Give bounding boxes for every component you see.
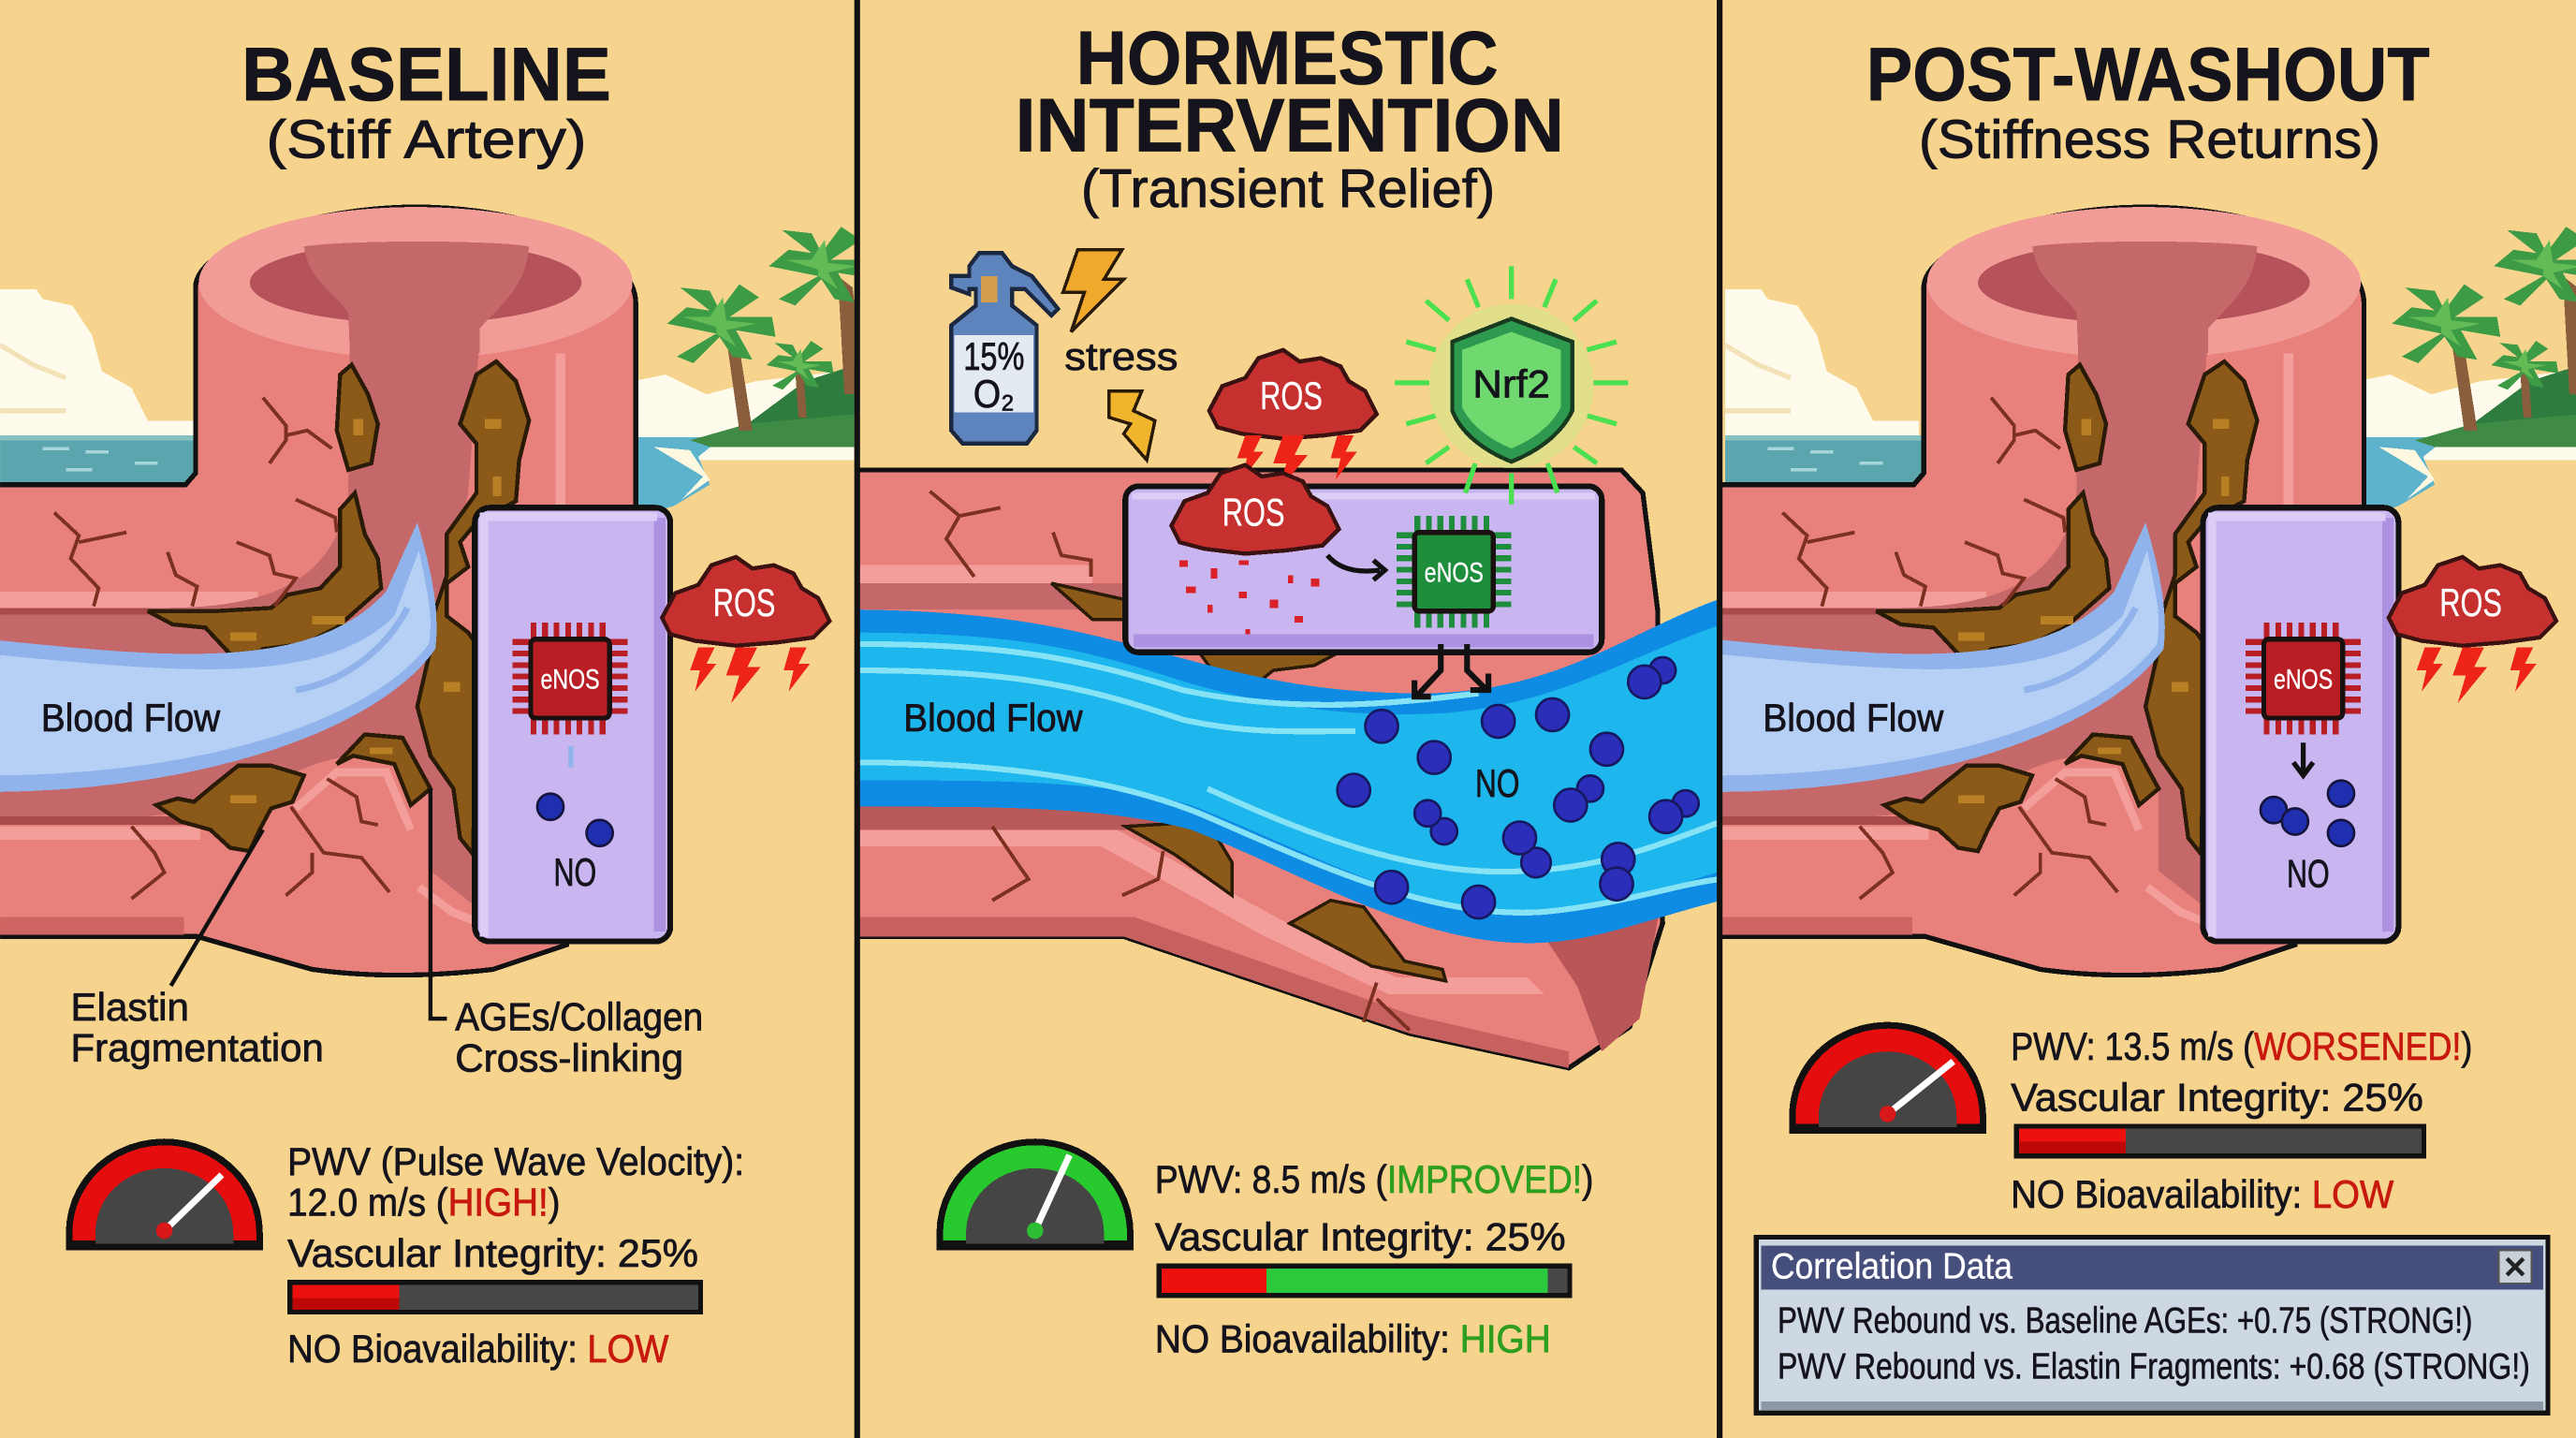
panel: hormetic intervention bbox=[846, 470, 1721, 1068]
panel: endothelial cell bbox=[1125, 486, 1602, 653]
metrics: baseline: Vascular Integrity: 25% bbox=[287, 1231, 698, 1275]
icon: NO molecules: NO bbox=[554, 850, 596, 894]
label: AGEs collagen cross-linking bbox=[455, 994, 703, 1079]
bar: vascular integrity bbox=[287, 1280, 703, 1314]
illustration: relaxed artery wall bbox=[846, 470, 1662, 1068]
title: hormetic intervention bbox=[1016, 17, 1564, 168]
title: baseline: BASELINE bbox=[242, 33, 611, 117]
gauge: intervention PWV bbox=[936, 1138, 1134, 1251]
icon: NO molecules with arrow: NO bbox=[2287, 852, 2330, 896]
icon: lower ROS cloud: ROS bbox=[1222, 491, 1284, 535]
metrics: intervention: PWV: 8.5 m/s (IMPROVED!) bbox=[1155, 1157, 1593, 1201]
title: hormetic intervention: HORMESTIC bbox=[1076, 17, 1499, 101]
illustration: beach scenery bbox=[0, 227, 877, 518]
arrows: eNOS to NO bbox=[1414, 644, 1488, 697]
metrics: post-washout: PWV: 13.5 m/s (WORSENED!) bbox=[2011, 1024, 2472, 1068]
icon: upper ROS cloud: ROS bbox=[1260, 374, 1323, 418]
illustration: wide blood stream bbox=[855, 598, 1721, 943]
metrics: baseline: PWV (Pulse Wave Velocity): bbox=[287, 1139, 744, 1183]
icon: Nrf2 shield with glow bbox=[1395, 266, 1628, 505]
metrics: intervention bbox=[1155, 1157, 1593, 1360]
metrics: intervention: Vascular Integrity: 25% bbox=[1155, 1215, 1566, 1259]
label: blood flow: Blood Flow bbox=[41, 696, 221, 740]
icon: eNOS chip: eNOS bbox=[540, 664, 600, 695]
icon: NO molecules with arrow bbox=[2261, 742, 2354, 896]
icon: NO molecules bbox=[1338, 657, 1699, 918]
gauge: baseline PWV bbox=[66, 1138, 263, 1251]
panel: post-washout bbox=[1715, 207, 2576, 976]
icon: eNOS chip bbox=[2256, 633, 2351, 725]
bar: vascular integrity bbox=[2014, 1123, 2426, 1158]
callout: correlation data window: Correlation Data bbox=[1771, 1246, 2012, 1286]
label: AGEs collagen cross-linking: AGEs/Collagen bbox=[455, 994, 703, 1038]
label: elastin fragmentation: Elastin bbox=[71, 985, 189, 1029]
icon: ROS cloud with bolts: ROS bbox=[713, 580, 775, 624]
icon: oxygen bottle 15% O2: 15% bbox=[963, 334, 1024, 378]
label: elastin fragmentation bbox=[71, 985, 324, 1070]
metrics: post-washout: NO Bioavailability: LOW bbox=[2011, 1172, 2393, 1216]
subtitle: stiff artery: (Stiff Artery) bbox=[266, 110, 587, 169]
metrics: post-washout bbox=[2011, 1024, 2472, 1216]
title: hormetic intervention: INTERVENTION bbox=[1016, 83, 1564, 168]
label: elastin fragmentation: Fragmentation bbox=[71, 1026, 324, 1070]
arrow: ROS to eNOS bbox=[1327, 555, 1385, 580]
icon: oxygen bottle 15% O2 bbox=[951, 253, 1058, 444]
icon: upper ROS cloud bbox=[1209, 350, 1377, 492]
label: NO: NO bbox=[1475, 761, 1519, 805]
divider: left bbox=[855, 0, 860, 1438]
icon: Nrf2 shield with glow: Nrf2 bbox=[1472, 362, 1550, 406]
title: post-washout: POST-WASHOUT bbox=[1866, 33, 2430, 117]
metrics: baseline: NO Bioavailability: LOW bbox=[287, 1327, 669, 1371]
panel: baseline (stiff artery) bbox=[0, 207, 877, 1019]
gauge: post-washout PWV bbox=[1789, 1022, 1986, 1134]
icon: active eNOS chip: eNOS bbox=[1425, 557, 1484, 588]
metrics: intervention: NO Bioavailability: HIGH bbox=[1155, 1316, 1551, 1360]
icon: ROS particles bbox=[1179, 560, 1319, 634]
metrics: baseline bbox=[287, 1139, 744, 1371]
icon: eNOS chip bbox=[522, 633, 618, 725]
metrics: baseline: 12.0 m/s (HIGH!) bbox=[287, 1181, 561, 1225]
subtitle: stiffness returns: (Stiffness Returns) bbox=[1919, 110, 2380, 169]
callout: correlation data window bbox=[1756, 1238, 2548, 1413]
icon: ROS cloud with bolts bbox=[662, 557, 829, 703]
icon: ROS cloud with bolts: ROS bbox=[2439, 580, 2502, 624]
label: AGEs collagen cross-linking: Cross-linking bbox=[455, 1035, 683, 1079]
metrics: post-washout: Vascular Integrity: 25% bbox=[2011, 1075, 2423, 1119]
illustration: beach scenery bbox=[1725, 227, 2576, 518]
label: blood flow: Blood Flow bbox=[903, 696, 1083, 740]
leader line: AGEs bbox=[431, 788, 446, 1019]
label: blood flow: Blood Flow bbox=[1763, 696, 1944, 740]
icon: eNOS chip: eNOS bbox=[2274, 664, 2333, 695]
bar: vascular integrity bbox=[1157, 1264, 1573, 1298]
label: stress: stress bbox=[1064, 334, 1178, 378]
icon: lower ROS cloud bbox=[1171, 465, 1339, 553]
icon: active eNOS chip bbox=[1406, 526, 1501, 618]
icon: NO molecules bbox=[537, 746, 613, 894]
illustration: stiff artery returned bbox=[1715, 207, 2398, 976]
subtitle: transient relief: (Transient Relief) bbox=[1081, 159, 1495, 219]
illustration: stiff artery with plaque and endothelial cell bbox=[0, 207, 670, 976]
icon: lightning bottom bbox=[1109, 391, 1155, 460]
icon: oxygen bottle 15% O2: O₂ bbox=[973, 372, 1015, 416]
divider: right bbox=[1717, 0, 1722, 1438]
icon: ROS cloud with bolts bbox=[2389, 557, 2556, 703]
icon: lightning top bbox=[1063, 250, 1123, 332]
leader line: elastin bbox=[171, 829, 263, 986]
